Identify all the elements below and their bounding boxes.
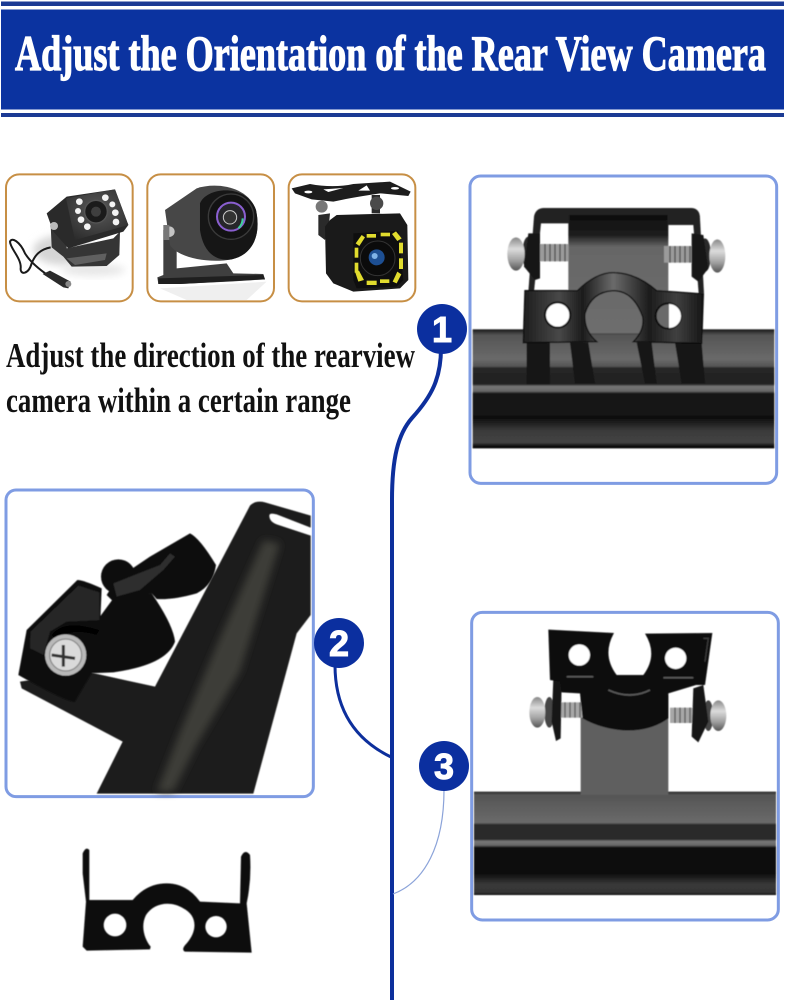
stem: [581, 695, 668, 795]
instruction text: Adjust the direction of the rearview: [6, 336, 416, 375]
panel 3: bracket back view: [472, 612, 778, 920]
mounting plate: [568, 213, 668, 333]
connector lines: [335, 348, 444, 1000]
swivel bracket: [18, 533, 216, 702]
left bolt: [529, 678, 585, 741]
screw head: [45, 634, 86, 676]
left bolt: [507, 233, 569, 280]
thumbnail: square camera with yellow LED ring: [289, 174, 415, 301]
camera thumbnails row: [6, 174, 415, 301]
step badge 3: [419, 741, 469, 791]
thumbnail: round lens camera: [147, 174, 274, 301]
right bolt: [664, 233, 725, 282]
right bolt: [670, 685, 726, 742]
bent bracket plate: [548, 630, 712, 730]
beam: [473, 329, 774, 448]
step badge 2: [314, 618, 364, 668]
step badge 1: [417, 304, 467, 354]
loose bracket part: [83, 849, 252, 953]
panel 2: bracket side view: [6, 490, 313, 797]
beam: [474, 792, 776, 895]
licence plate arm: [20, 502, 311, 794]
panel 1: bracket front view: [470, 176, 777, 483]
diagonal highlight band: [157, 540, 280, 792]
step badge 3: 3: [434, 746, 454, 787]
instruction text: [6, 336, 416, 420]
step badge 1: 1: [432, 309, 452, 350]
header banner: [1, 2, 784, 117]
front bent plate: [523, 273, 703, 343]
instruction text: camera within a certain range: [6, 381, 351, 420]
thumbnail: wired camera with white LEDs: [6, 174, 133, 301]
step badge 2: 2: [329, 623, 349, 664]
